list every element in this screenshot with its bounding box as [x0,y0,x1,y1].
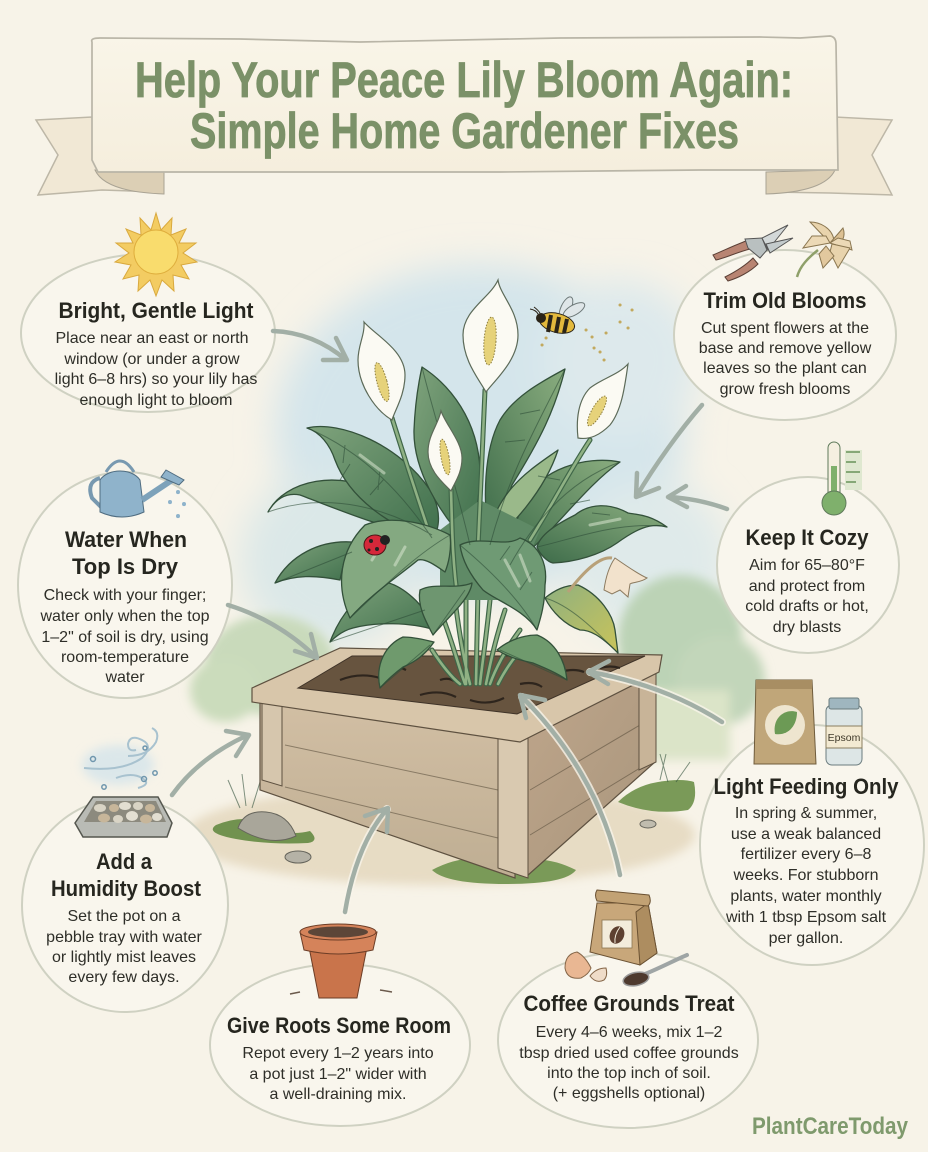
body text: and protect from [749,578,865,595]
ladybug [364,535,390,555]
body text: Set the pot on a [68,908,181,925]
sky wash [240,265,730,650]
flower: right spathe [577,364,628,438]
plant: far left leaf [268,480,432,535]
body text: In spring & summer, [735,805,877,822]
body text: plants, water monthly [730,888,882,905]
plant: lower left leaf [330,582,435,642]
wooden planter box [252,648,662,878]
body text: water only when the top [40,608,210,625]
body text: leaves so the plant can [703,360,867,377]
plant: leaf veins [268,367,667,688]
body text: Repot every 1–2 years into [242,1045,434,1062]
body text: fertilizer every 6–8 [741,846,871,863]
ground [185,754,695,885]
body text: Every 4–6 weeks, mix 1–2 [536,1024,722,1041]
panel: trim old blooms [674,222,896,420]
plant: light leaf [486,450,558,545]
icon: spoon [622,955,687,988]
arrow: light to flower [273,331,347,360]
wilted flower [568,558,647,597]
arrow: feeding to soil [588,661,722,722]
icon: watering can [90,461,184,517]
planter: top rim [252,648,662,742]
icon: pruning shears [713,225,793,281]
body text: Aim for 65–80°F [749,557,865,574]
body text: dry blasts [773,619,841,636]
arrow: trim to plant [636,405,702,497]
body text: water [104,669,145,686]
body text: a pot just 1–2" wider with [249,1066,427,1083]
icon: thermometer [822,442,862,515]
icon: fertilizer bag [754,680,816,764]
heading: Keep It Cozy [746,525,869,550]
banner: main ribbon [92,36,838,172]
icon: terracotta pot [290,924,392,998]
panel: light feeding only [700,680,924,965]
plant: right far leaf [510,460,620,565]
panel: water when top is dry [18,461,232,698]
heading: Water When [65,527,187,552]
body text: window (or under a grow [63,351,240,368]
icon: mist swirls [82,728,157,789]
plant: dark centre foliage [440,500,540,600]
planter: soil [298,656,645,714]
brand wordmark: PlantCareToday [752,1113,909,1140]
body text: grow fresh blooms [720,381,850,398]
panel: coffee grounds treat [498,890,758,1128]
plant: tall centre-left leaf [414,367,480,545]
planter: front face [260,698,515,878]
icon: pebble tray [75,797,172,837]
body text: or lightly mist leaves [52,949,196,966]
arrow: coffee to soil [520,695,620,875]
plant: leaf highlights [360,420,620,586]
arrow: humidity to box [172,731,249,795]
panel: add a humidity boost [22,728,228,1012]
title line two: Simple Home Gardener Fixes [190,103,739,159]
body text: weeks. For stubborn [733,867,878,884]
plant: tall centre-right leaf [485,369,565,545]
title banner [36,36,892,195]
plant: base stems [432,590,530,684]
plant: ladybug leaf [342,520,451,618]
bee with pollen [530,295,632,360]
plant: front centre leaf [460,538,546,630]
body text: base and remove yellow [699,340,872,357]
icon: Epsom salt jar: Epsom [828,732,861,744]
banner: right tail [770,117,892,195]
heading: Give Roots Some Room [227,1013,451,1038]
heading: Add a [96,849,153,874]
body text: 1–2" of soil is dry, using [41,629,209,646]
icon: coffee bag [590,890,657,965]
body text: Check with your finger; [44,587,206,604]
body text: Place near an east or north [55,330,249,347]
icon: eggshells [565,952,607,981]
plant: low left leaf [275,542,352,583]
peace lily plant [268,280,667,688]
panel: bright gentle light [21,213,275,412]
plant: upper left leaf [307,427,438,538]
heading: Coffee Grounds Treat [524,991,735,1016]
plant: yellowing leaf [545,585,618,653]
body text: pebble tray with water [46,929,202,946]
planter: right face [525,668,655,876]
panel: give roots some room [210,924,470,1126]
heading line two: Top Is Dry [72,554,179,579]
body text: (+ eggshells optional) [553,1085,705,1102]
body text: Cut spent flowers at the [701,320,869,337]
body text: room-temperature [61,649,189,666]
body text: light 6–8 hrs) so your lily has [55,371,257,388]
body text: every few days. [68,969,180,986]
panel: keep it cozy [717,442,899,653]
flower: top spathe [463,280,518,392]
flower: left spathe [358,322,405,420]
icon: Epsom salt jar [826,698,862,765]
arrow: roots to box [345,808,388,912]
icon: dried flower [797,222,852,277]
background bushes [190,575,765,760]
icon: sun [115,213,197,296]
body text: per gallon. [769,930,843,947]
body text: cold drafts or hot, [745,598,869,615]
body text: a well-draining mix. [270,1086,406,1103]
banner: left tail [36,117,162,195]
flower: centre spathe [428,411,462,491]
arrow: water to box [228,605,317,658]
planter: posts [262,700,282,786]
plant: right big leaf [537,506,667,563]
arrow: cozy to plant [668,486,727,509]
plant: small centre leaf [419,583,472,635]
plant: flower stems [392,390,590,600]
body text: into the top inch of soil. [547,1065,711,1082]
plant: low soil leaves [379,635,567,688]
body text: tbsp dried used coffee grounds [519,1045,739,1062]
heading: Trim Old Blooms [704,288,866,313]
banner: folds [95,170,835,194]
body text: with 1 tbsp Epsom salt [725,909,887,926]
body text: enough light to bloom [80,392,232,409]
heading: Bright, Gentle Light [58,298,254,323]
heading: Light Feeding Only [714,774,899,799]
body text: use a weak balanced [731,826,881,843]
heading line two: Humidity Boost [51,876,202,901]
